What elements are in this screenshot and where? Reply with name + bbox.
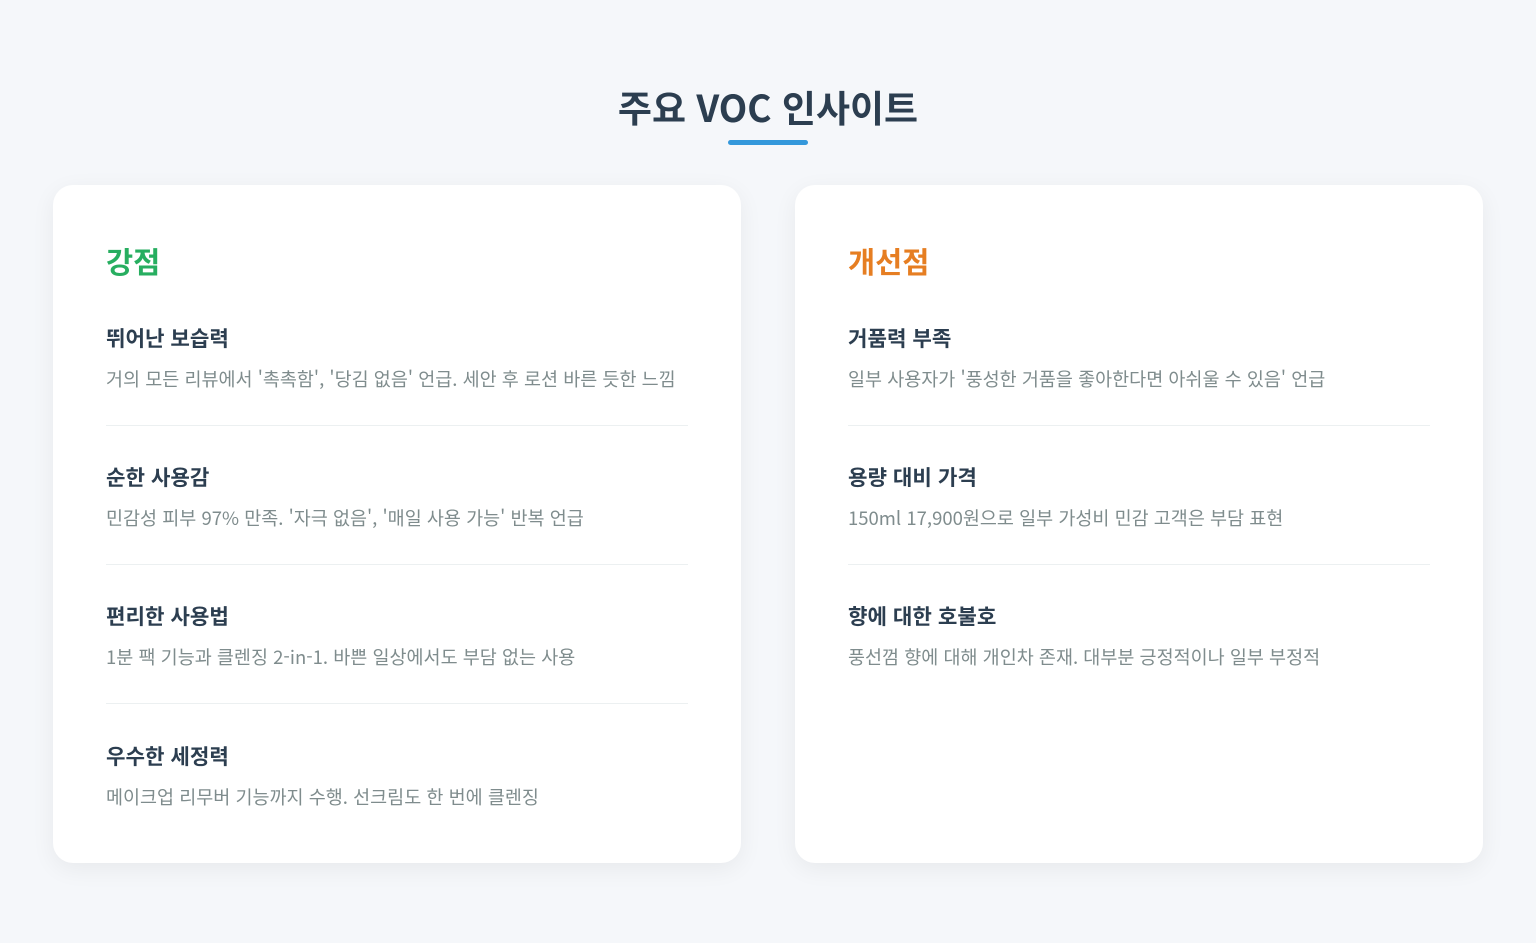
item: scent: 향에 대한 호불호 [848, 600, 996, 631]
heading: improvements: 개선점 [848, 240, 929, 282]
item: convenient: 편리한 사용법 [106, 600, 229, 631]
panel: strengths [53, 185, 741, 863]
item: scent: 풍선껌 향에 대해 개인차 존재. 대부분 긍정적이나 일부 부정적 [848, 644, 1320, 670]
item: convenient [106, 600, 688, 704]
item: foam: 일부 사용자가 '풍성한 거품을 좋아한다면 아쉬울 수 있음' 언급 [848, 366, 1325, 392]
item: price [848, 461, 1430, 565]
panel: improvements [795, 185, 1483, 863]
item: cleansing [106, 740, 539, 810]
item: convenient: 1분 팩 기능과 클렌징 2-in-1. 바쁜 일상에서도 부담 없는 사용 [106, 644, 575, 670]
item: price: 용량 대비 가격 [848, 461, 977, 492]
item: moisturizing: 뛰어난 보습력 [106, 322, 229, 353]
heading: strengths: 강점 [106, 240, 160, 282]
item: foam [848, 322, 1430, 426]
item: scent [848, 600, 1320, 670]
item: gentle: 민감성 피부 97% 만족. '자극 없음', '매일 사용 가능' 반복 언급 [106, 505, 584, 531]
item: price: 150ml 17,900원으로 일부 가성비 민감 고객은 부담 표현 [848, 505, 1283, 531]
item: cleansing: 우수한 세정력 [106, 740, 229, 771]
title: 주요 VOC 인사이트 [618, 79, 918, 133]
item: cleansing: 메이크업 리무버 기능까지 수행. 선크림도 한 번에 클렌징 [106, 784, 539, 810]
item: gentle: 순한 사용감 [106, 461, 209, 492]
item: foam: 거품력 부족 [848, 322, 951, 353]
item: moisturizing [106, 322, 688, 426]
item: moisturizing: 거의 모든 리뷰에서 '촉촉함', '당김 없음' 언급. 세안 후 로션 바른 듯한 느낌 [106, 366, 676, 392]
item: gentle [106, 461, 688, 565]
title underline [728, 140, 808, 145]
